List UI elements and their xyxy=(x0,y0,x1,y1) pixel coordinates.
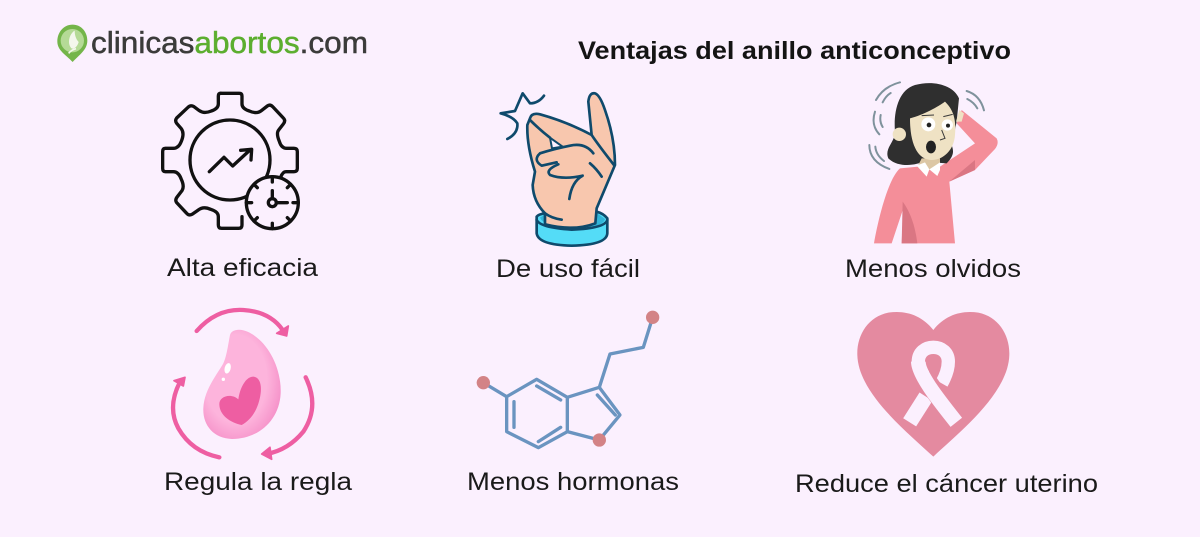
icon: molecule xyxy=(477,311,659,448)
icon: location pin with leaf xyxy=(57,25,87,62)
label: Regula la regla xyxy=(164,468,352,496)
logo: clinicasabortos.com xyxy=(57,25,368,62)
panel: Menos hormonas xyxy=(467,311,679,496)
label: Reduce el cáncer uterino xyxy=(795,470,1098,498)
icon: snapping hand xyxy=(501,93,615,246)
icon: confused woman xyxy=(869,82,998,243)
label: De uso fácil xyxy=(496,255,640,283)
panel: Menos olvidos xyxy=(845,82,1021,283)
icon: drop with heart and cycle arrows xyxy=(173,310,312,459)
label: Alta eficacia xyxy=(167,254,318,282)
logo text: clinicasabortos.com xyxy=(91,25,368,60)
panel: Alta eficacia xyxy=(163,93,318,282)
title: Ventajas del anillo anticonceptivo xyxy=(578,37,1011,65)
label: Menos hormonas xyxy=(467,468,679,496)
panel: De uso fácil xyxy=(496,93,640,283)
label: Menos olvidos xyxy=(845,255,1021,283)
panel: Regula la regla xyxy=(164,310,352,496)
icon: heart with ribbon xyxy=(857,312,1009,457)
icon: gear with chart and clock xyxy=(163,93,298,229)
panel: Reduce el cáncer uterino xyxy=(795,312,1098,498)
